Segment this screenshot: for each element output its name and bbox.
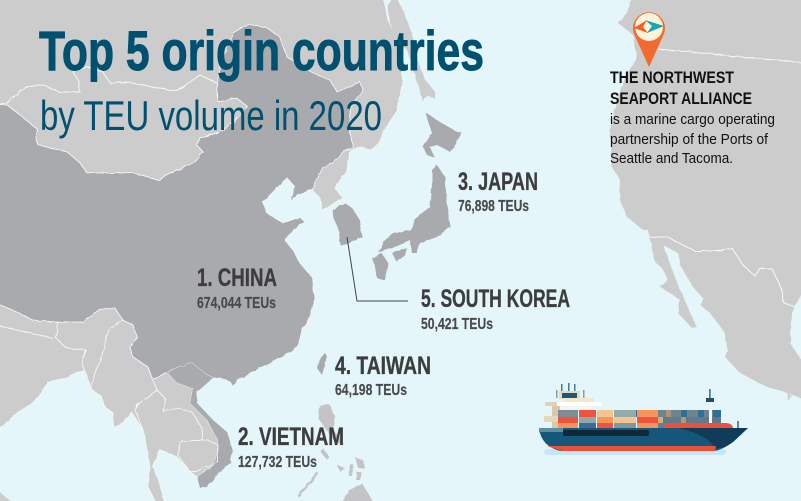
region: Sakhalin xyxy=(388,0,435,101)
ship superstructure xyxy=(544,383,602,430)
ship reflection xyxy=(544,449,726,455)
label: Japan: 76,898 TEUs xyxy=(458,198,529,215)
internal borders xyxy=(0,320,218,472)
region: Russia xyxy=(0,0,403,160)
ship red waterline xyxy=(547,446,716,451)
region: China xyxy=(0,24,363,387)
ship mast xyxy=(706,389,714,428)
leader line: South Korea xyxy=(347,237,408,301)
label: Vietnam: 2. VIETNAM xyxy=(238,423,344,451)
icon: location pin xyxy=(633,12,665,67)
country: South Korea xyxy=(332,203,362,245)
region: Sumatra xyxy=(0,488,15,501)
label: Vietnam: 127,732 TEUs xyxy=(238,454,317,471)
map: North America xyxy=(610,0,801,401)
label: South Korea: 50,421 TEUs xyxy=(421,316,493,333)
map: Asia xyxy=(0,0,462,501)
callout: Northwest Seaport Alliance: partnership of the Ports of xyxy=(610,132,769,148)
callout: Northwest Seaport Alliance: THE NORTHWEST xyxy=(610,68,735,87)
country: Japan xyxy=(372,112,462,280)
ship bow deck xyxy=(663,423,733,429)
label: Taiwan: 64,198 TEUs xyxy=(335,382,407,399)
label: Japan: 3. JAPAN xyxy=(458,168,538,196)
title line 1: Top 5 origin countries xyxy=(39,19,484,82)
label: South Korea xyxy=(421,285,570,333)
ship containers xyxy=(558,410,721,430)
region: Mongolia xyxy=(0,67,248,180)
borders xyxy=(648,49,801,307)
label: China: 674,044 TEUs xyxy=(197,295,276,312)
label: Japan xyxy=(458,168,538,215)
label: Taiwan xyxy=(335,352,431,399)
region: Canada, USA and Mexico xyxy=(610,0,801,400)
title line 2: by TEU volume in 2020 xyxy=(40,92,382,139)
ship hull xyxy=(539,428,748,451)
country: Vietnam xyxy=(165,363,233,488)
illustration: container ship xyxy=(539,383,748,455)
label: Taiwan: 4. TAIWAN xyxy=(335,352,431,380)
callout: Northwest Seaport Alliance: SEAPORT ALLIANCE xyxy=(610,89,752,108)
callout: Northwest Seaport Alliance xyxy=(610,68,775,167)
region: Philippines xyxy=(297,405,375,501)
region: Mexican tip xyxy=(787,393,792,401)
region: South and Southeast Asia xyxy=(0,303,218,501)
callout: Northwest Seaport Alliance: Seattle and Tacoma. xyxy=(610,151,733,167)
ship dark deck band xyxy=(563,430,649,436)
region: North Korea xyxy=(312,150,352,210)
label: China: 1. CHINA xyxy=(197,264,277,292)
title xyxy=(39,19,484,139)
callout: Northwest Seaport Alliance: is a marine cargo operating xyxy=(610,112,775,128)
label: China xyxy=(197,264,277,312)
country: Taiwan xyxy=(317,353,327,375)
label: South Korea: 5. SOUTH KOREA xyxy=(421,285,570,313)
label: Vietnam xyxy=(238,423,344,471)
